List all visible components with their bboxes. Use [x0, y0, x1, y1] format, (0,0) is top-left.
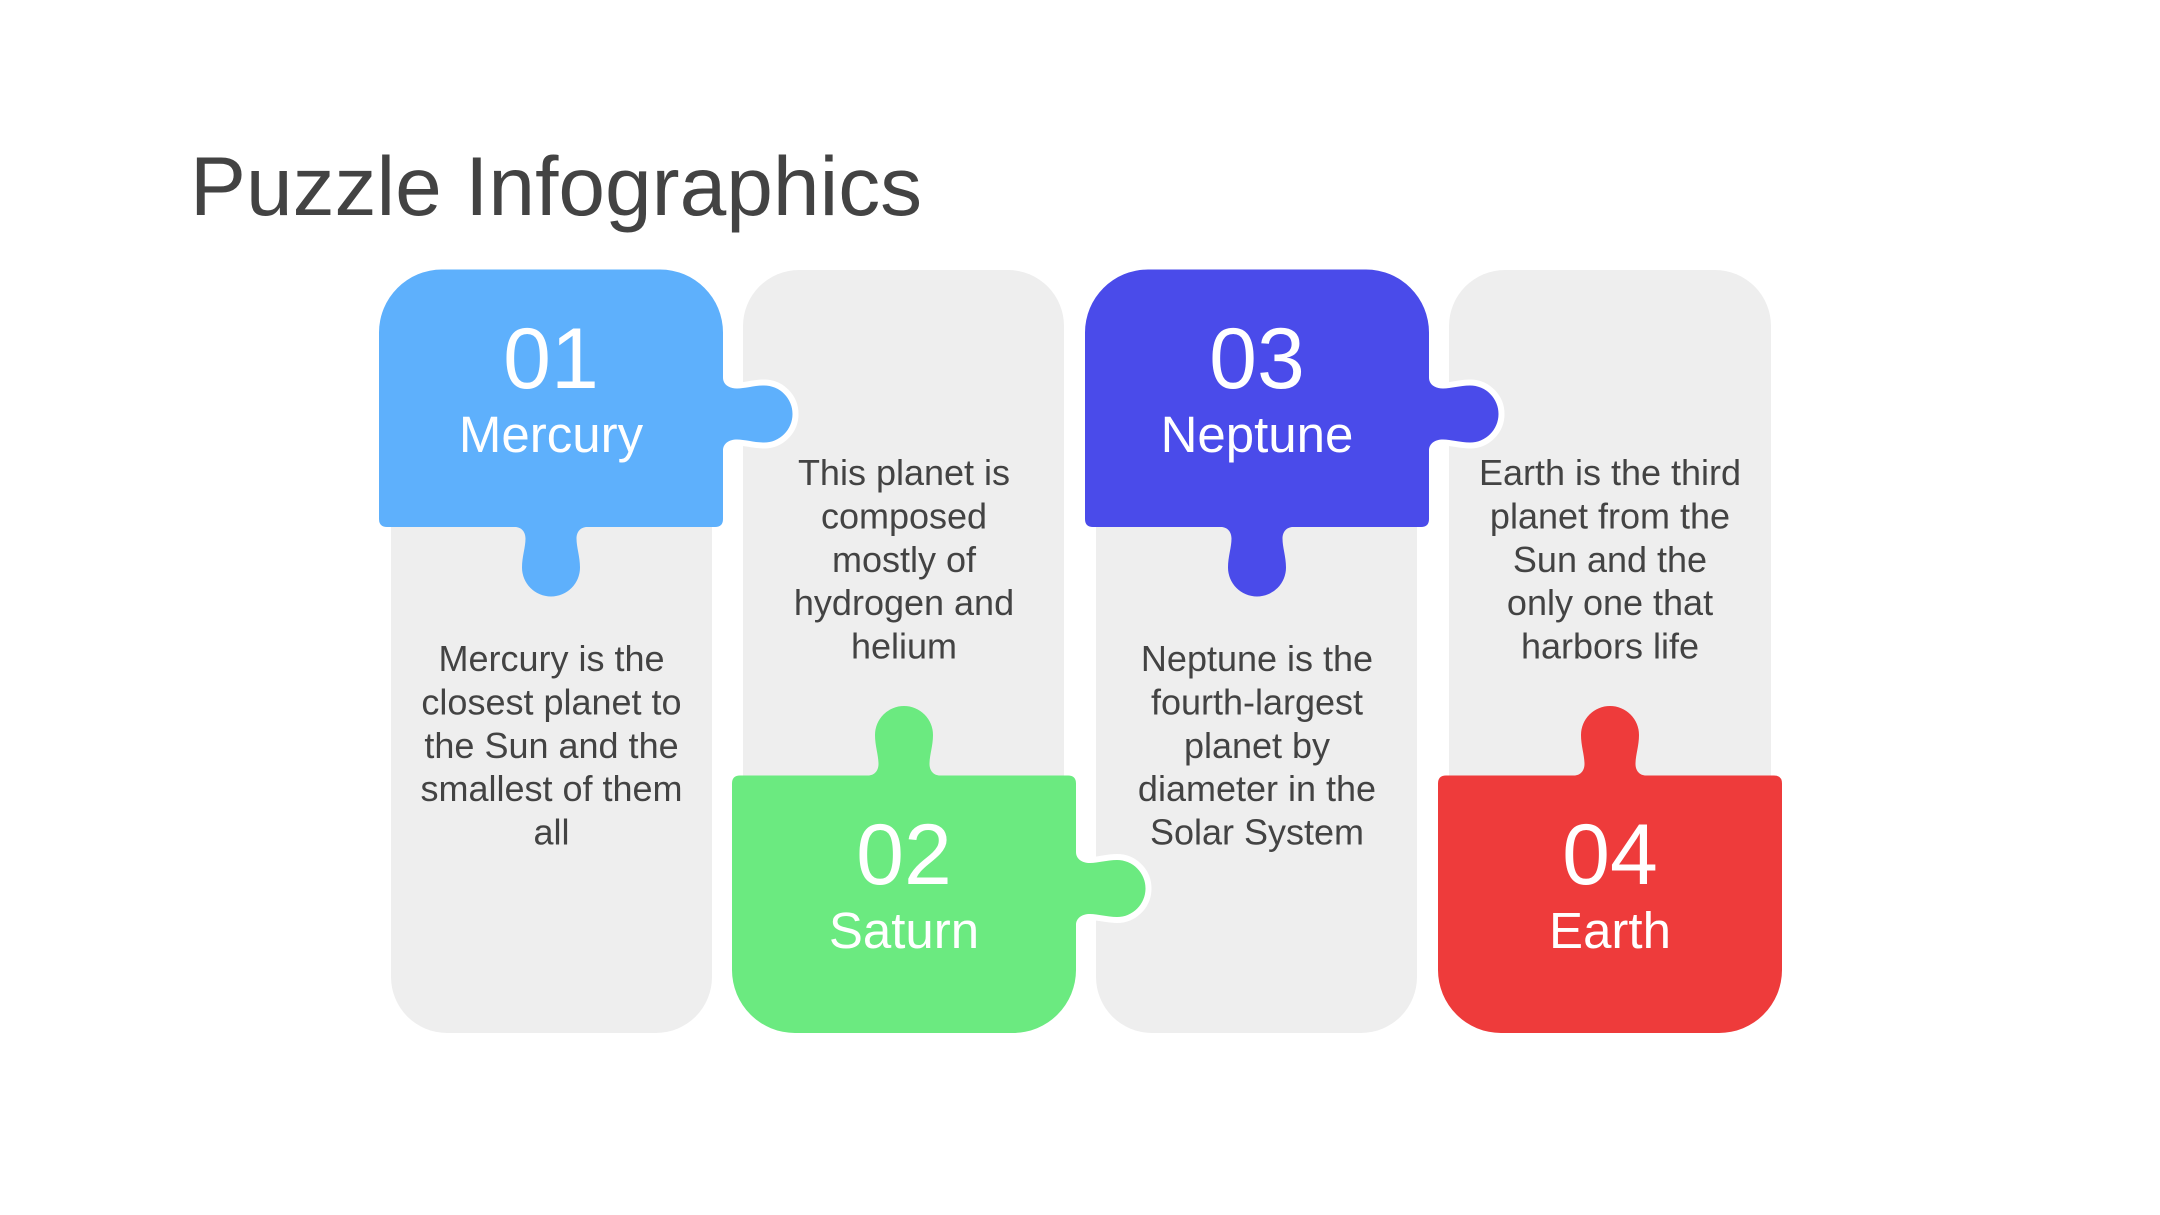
text: Mercury description: all [533, 812, 570, 853]
number: 01: 01 [503, 311, 599, 407]
text: Earth description: harbors life [1521, 626, 1699, 667]
text: Mercury description: smallest of them [420, 768, 683, 809]
title: Puzzle Infographics [190, 139, 922, 233]
text: Neptune description: Solar System [1150, 812, 1364, 853]
label: Mercury: Mercury [459, 406, 644, 463]
text: Saturn description: composed [821, 495, 987, 536]
text: Earth description: planet from the [1490, 495, 1730, 536]
text: Neptune description: Neptune is the [1141, 638, 1373, 679]
puzzle piece: 01 Mercury [379, 270, 792, 596]
puzzle piece: 04 Earth [1438, 706, 1782, 1033]
puzzle piece: 02 Saturn [732, 706, 1146, 1033]
text: Neptune description: fourth-largest [1151, 681, 1363, 722]
text: Mercury description: closest planet to [421, 681, 682, 722]
text: Earth description: Earth is the third [1479, 452, 1741, 493]
text: Neptune description: diameter in the [1138, 768, 1376, 809]
label: Earth: Earth [1549, 902, 1671, 959]
number: 04: 04 [1562, 807, 1658, 903]
label: Neptune: Neptune [1161, 406, 1353, 463]
panel: Mercury description [391, 270, 712, 1033]
panel: Earth description [1449, 270, 1771, 1033]
panel: Saturn description [743, 270, 1064, 1033]
number: 02: 02 [856, 807, 952, 903]
text: Neptune description: planet by [1184, 725, 1330, 766]
number: 03: 03 [1209, 311, 1305, 407]
text: Earth description: Sun and the [1513, 539, 1707, 580]
label: Saturn: Saturn [829, 902, 979, 959]
panel: Neptune description [1096, 270, 1417, 1033]
text: Mercury description: the Sun and the [424, 725, 679, 766]
text: Saturn description: helium [851, 626, 957, 667]
puzzle piece: 03 Neptune [1085, 270, 1498, 596]
text: Mercury description: Mercury is the [438, 638, 665, 679]
text: Saturn description: hydrogen and [794, 582, 1014, 623]
text: Saturn description: mostly of [832, 539, 977, 580]
text: Saturn description: This planet is [798, 452, 1010, 493]
text: Earth description: only one that [1507, 582, 1713, 623]
